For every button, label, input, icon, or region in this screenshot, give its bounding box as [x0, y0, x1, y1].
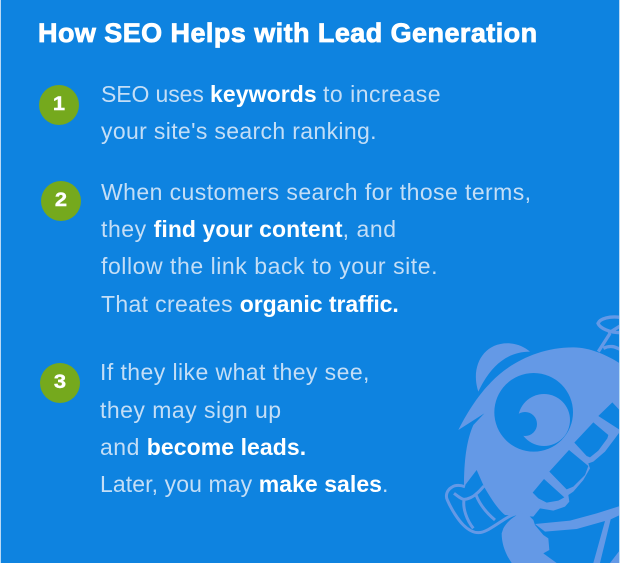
number badge 3 [40, 363, 80, 403]
step 1 [39, 81, 441, 144]
mascot illustration [444, 315, 619, 563]
number badge 1: 1 [53, 94, 65, 115]
step 2 text: follow the link back to your site. [101, 253, 438, 279]
step 3 [40, 359, 389, 497]
step 3 text: and become leads. [100, 434, 306, 460]
step 3 text [100, 359, 389, 497]
step 3 text: they may sign up [100, 397, 282, 423]
step 1 text: your site's search ranking. [101, 118, 377, 144]
step 2 text: they find your content, and [101, 216, 397, 242]
step 2 text: That creates organic traffic. [101, 291, 399, 317]
number badge 3: 3 [54, 372, 66, 393]
step 2 text: When customers search for those terms, [101, 179, 532, 205]
number badge 1 [39, 85, 79, 125]
number badge 2 [41, 181, 81, 221]
step 1 text: SEO uses keywords to increase [101, 81, 441, 107]
step 2 [41, 179, 532, 317]
step 1 text [101, 81, 441, 144]
step 3 text: Later, you may make sales. [100, 471, 389, 497]
step 3 text: If they like what they see, [100, 359, 370, 385]
title: How SEO Helps with Lead Generation [38, 18, 538, 48]
step 2 text [101, 179, 532, 317]
number badge 2: 2 [55, 190, 67, 211]
